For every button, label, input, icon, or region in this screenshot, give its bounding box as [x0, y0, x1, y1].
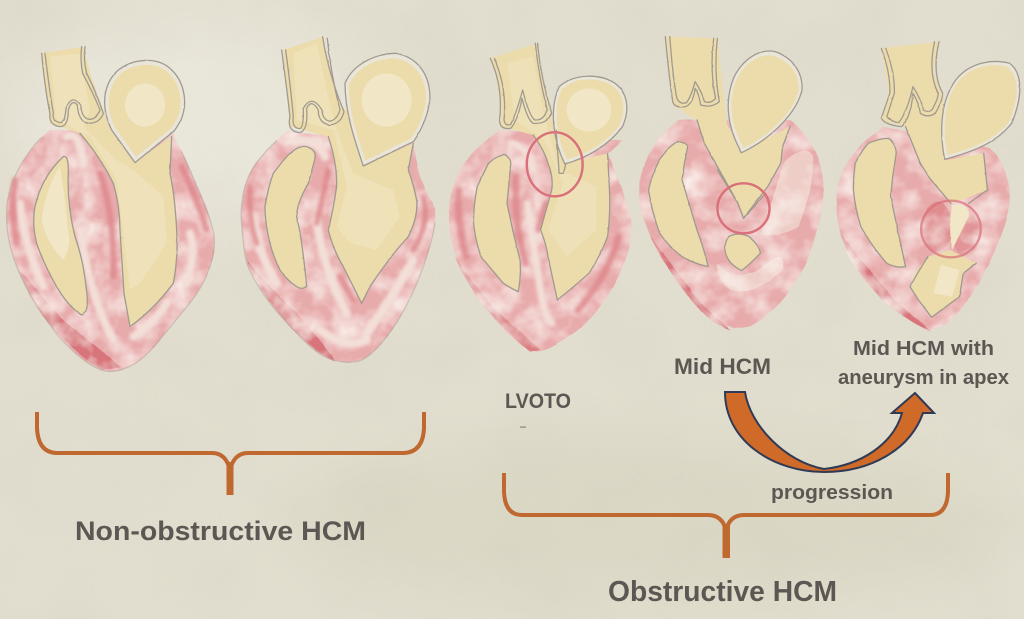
- label: Mid HCM: Mid HCM: [674, 354, 771, 379]
- heart 2 muscle wall: [241, 132, 435, 362]
- brace: obstructive group: [504, 473, 948, 558]
- heart 1 left atrium: [105, 60, 185, 163]
- label: Mid HCM with aneurysm in apex: Mid HCM with: [853, 338, 994, 360]
- heart 1 right ventricle: [34, 156, 87, 315]
- heading: Obstructive HCM: Obstructive HCM: [608, 576, 837, 608]
- label: Mid HCM with aneurysm in apex: [838, 338, 1009, 389]
- heart 5 right ventricle: [853, 138, 906, 267]
- heading: Non-obstructive HCM: Non-obstructive HCM: [75, 516, 366, 546]
- heart 5 left ventricle and aorta: [881, 42, 987, 317]
- arrow: progression: [725, 392, 934, 472]
- panel: heart 5, mid HCM with apical aneurysm: [836, 42, 1020, 332]
- panel: heart 2, non-obstructive: [241, 37, 435, 362]
- label: progression: progression: [771, 482, 893, 504]
- heart 3 muscle wall: [449, 130, 632, 352]
- heart 1 left ventricle and aorta: [42, 47, 177, 327]
- heart 3 outlines: [490, 43, 610, 300]
- heart 3 right ventricle: [474, 155, 520, 292]
- heart 2 left atrium: [345, 53, 430, 166]
- icon: aneurysm red circle: [921, 201, 981, 257]
- panel: heart 3, LVOTO: [449, 43, 632, 352]
- heart 2 left ventricle and aorta: [283, 37, 417, 303]
- heart 5 muscle wall: [836, 127, 1010, 332]
- heart 2 right ventricle: [265, 146, 315, 288]
- icon: LVOTO red circle: [527, 132, 583, 196]
- label: Mid HCM with aneurysm in apex: aneurysm in apex: [838, 367, 1009, 389]
- icon: mid HCM red circle: [717, 183, 770, 233]
- heart 5 left atrium: [942, 61, 1020, 159]
- heart 4 outlines: [665, 37, 766, 218]
- heart 4 right ventricle: [649, 142, 708, 267]
- heart 1 outlines: [6, 47, 214, 372]
- decorative small dash: [520, 426, 526, 428]
- heart 4 left ventricle and aorta: [666, 37, 790, 271]
- heart 4 left atrium: [728, 51, 802, 153]
- panel: heart 1, non-obstructive: [6, 47, 214, 372]
- heart 2 outlines: [241, 37, 435, 362]
- heart 1 muscle wall: [6, 130, 214, 372]
- panel: heart 4, mid HCM: [639, 37, 824, 330]
- heart 5 outlines: [881, 42, 943, 127]
- heart 3 left ventricle and aorta: [490, 43, 610, 300]
- label: LVOTO: LVOTO: [505, 390, 571, 413]
- brace: non-obstructive group: [37, 412, 424, 495]
- heart 3 left atrium: [553, 76, 627, 164]
- heart 4 muscle wall: [639, 120, 824, 330]
